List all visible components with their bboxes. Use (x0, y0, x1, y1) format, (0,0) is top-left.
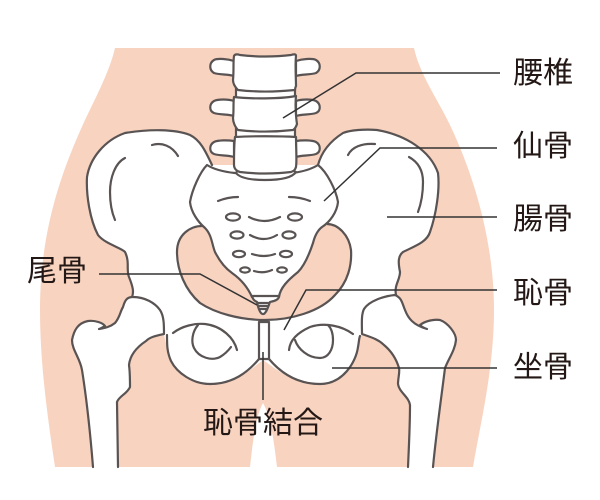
leader line: 恥骨結合 (262, 352, 264, 400)
ischium right (269, 336, 360, 384)
lumbar discs (236, 88, 296, 180)
label: 坐骨: 坐骨 (513, 351, 573, 384)
right iliac upper line (348, 144, 375, 155)
label: 仙骨: 仙骨 (513, 130, 573, 163)
left iliac outline (87, 130, 212, 297)
coccyx (252, 296, 279, 314)
pelvis (87, 130, 439, 384)
leader line: 尾骨 (99, 274, 257, 305)
ischium left (167, 335, 259, 384)
left obturator inner (192, 325, 231, 359)
right femur (362, 295, 456, 467)
right iliac crest line (409, 157, 423, 212)
right iliac outline (318, 130, 439, 295)
left obturator (173, 324, 237, 350)
leader line: 坐骨 (332, 367, 497, 369)
body silhouette (40, 48, 494, 467)
label: 尾骨: 尾骨 (27, 255, 87, 288)
lumbar processes (210, 59, 320, 157)
vertebra L4 (233, 96, 297, 132)
right obturator (289, 325, 353, 350)
leader line: 腰椎 (283, 73, 500, 118)
vertebra L5 (234, 136, 296, 174)
sacral foramina (218, 197, 310, 273)
leader line: 腸骨 (387, 216, 497, 218)
left femur (72, 297, 164, 467)
label: 腰椎: 腰椎 (513, 57, 573, 90)
left iliac crest line (110, 158, 125, 220)
vertebra L3 (233, 54, 296, 92)
label: 恥骨結合: 恥骨結合 (203, 407, 323, 440)
leader line: 恥骨 (284, 290, 497, 330)
pelvic inlet (177, 224, 351, 320)
right obturator inner (295, 325, 333, 358)
label: 恥骨: 恥骨 (513, 277, 573, 310)
left iliac upper line (152, 144, 178, 156)
label: 腸骨: 腸骨 (513, 203, 573, 236)
pubic symphysis (259, 322, 269, 359)
sacrum (190, 165, 338, 297)
leader line: 仙骨 (324, 148, 497, 201)
pelvis base (87, 130, 439, 384)
lumbar spine (210, 54, 320, 180)
